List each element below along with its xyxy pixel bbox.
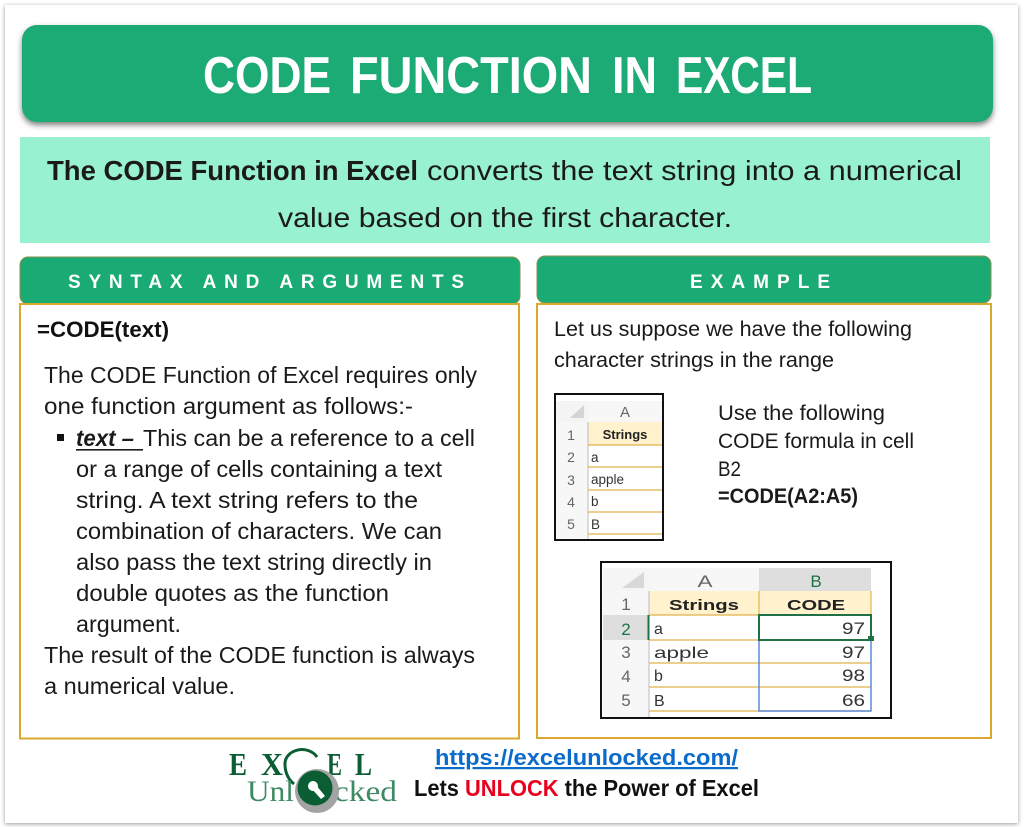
- panel: example: [537, 256, 991, 738]
- syntax text box: This can be a reference to a cell: [143, 425, 475, 451]
- title banner: EXCEL: [676, 47, 812, 105]
- instruction text: B2: [718, 457, 741, 481]
- result table: 97: [842, 644, 865, 662]
- small table: source strings: a: [591, 450, 599, 465]
- logo: Excel Unlocked: [229, 746, 397, 813]
- small table: source strings: 3: [567, 472, 575, 488]
- logo: Excel Unlocked: X: [261, 746, 283, 782]
- result table: B: [810, 572, 822, 591]
- result table: A: [698, 572, 713, 591]
- title banner: FUNCTION: [350, 47, 592, 105]
- example intro text: Let us suppose we have the following: [554, 317, 912, 341]
- syntax text box: The result of the CODE function is always: [44, 642, 475, 668]
- tagline: Lets UNLOCK the Power of Excel: [414, 775, 759, 801]
- small table: source strings: apple: [591, 472, 624, 487]
- result table: apple: [654, 645, 709, 662]
- syntax text box: string. A text string refers to the: [76, 487, 418, 513]
- syntax text box: text –: [76, 425, 134, 451]
- example text box: [537, 304, 991, 738]
- small table: source strings: [555, 394, 663, 540]
- example heading: [537, 256, 991, 303]
- syntax heading: [20, 257, 520, 304]
- result table: 66: [842, 692, 865, 710]
- syntax text box: combination of characters. We can: [76, 518, 442, 544]
- example heading: EXAMPLE: [690, 272, 830, 293]
- syntax text box: argument.: [76, 611, 181, 637]
- panel: syntax and arguments: [20, 257, 520, 738]
- result table: b: [654, 668, 663, 685]
- syntax text box: also pass the text string directly in: [76, 549, 432, 575]
- definition band: The CODE Function in Excel: [47, 155, 418, 186]
- syntax heading: SYNTAX AND ARGUMENTS: [68, 272, 464, 293]
- website link: https://excelunlocked.com/: [435, 745, 738, 770]
- instruction text: =CODE(A2:A5): [718, 484, 858, 508]
- syntax text box: double quotes as the function: [76, 580, 389, 606]
- result table: [601, 562, 891, 718]
- small table: source strings: 4: [567, 494, 575, 510]
- small table: source strings: A: [620, 404, 630, 421]
- small table: source strings: 2: [567, 449, 575, 465]
- small table: source strings: b: [591, 494, 599, 509]
- logo: Excel Unlocked: L: [355, 746, 372, 782]
- result table: B: [654, 693, 665, 710]
- instruction text: CODE formula in cell: [718, 429, 914, 453]
- definition band: converts the text string into a numerical: [427, 155, 962, 186]
- result table: 4: [621, 667, 631, 686]
- small table: source strings: B: [591, 517, 600, 532]
- instruction text: [718, 401, 914, 508]
- definition band: value based on the first character.: [278, 202, 732, 233]
- title banner: CODE: [203, 47, 331, 105]
- result table: 3: [621, 643, 631, 662]
- result table: Strings: [669, 597, 739, 614]
- small table: source strings: 5: [567, 516, 575, 532]
- result table: 1: [621, 595, 631, 614]
- result table: 98: [842, 667, 865, 685]
- logo: Excel Unlocked: Unl: [247, 775, 294, 808]
- syntax text box: [20, 304, 519, 738]
- result table: CODE: [787, 597, 845, 614]
- title banner: IN: [612, 47, 657, 105]
- syntax text box: or a range of cells containing a text: [76, 456, 443, 482]
- result table: 97: [842, 620, 865, 638]
- syntax text box: The CODE Function of Excel requires only: [44, 362, 477, 388]
- syntax text box: =CODE(text): [37, 317, 169, 342]
- syntax text box: one function argument as follows:-: [44, 393, 413, 419]
- logo: Excel Unlocked: E: [229, 746, 247, 782]
- definition band: [20, 137, 990, 243]
- example intro text: character strings in the range: [554, 348, 834, 372]
- logo: Excel Unlocked: E: [327, 746, 342, 782]
- title banner: [22, 25, 993, 122]
- result table: 5: [621, 691, 631, 710]
- result table: 2: [621, 620, 631, 639]
- small table: source strings: 1: [567, 427, 575, 443]
- result table: a: [654, 621, 663, 638]
- instruction text: Use the following: [718, 401, 885, 425]
- example intro text: [554, 317, 912, 372]
- syntax text box: a numerical value.: [44, 673, 235, 699]
- logo: Excel Unlocked: cked: [334, 775, 397, 808]
- small table: source strings: Strings: [603, 427, 647, 442]
